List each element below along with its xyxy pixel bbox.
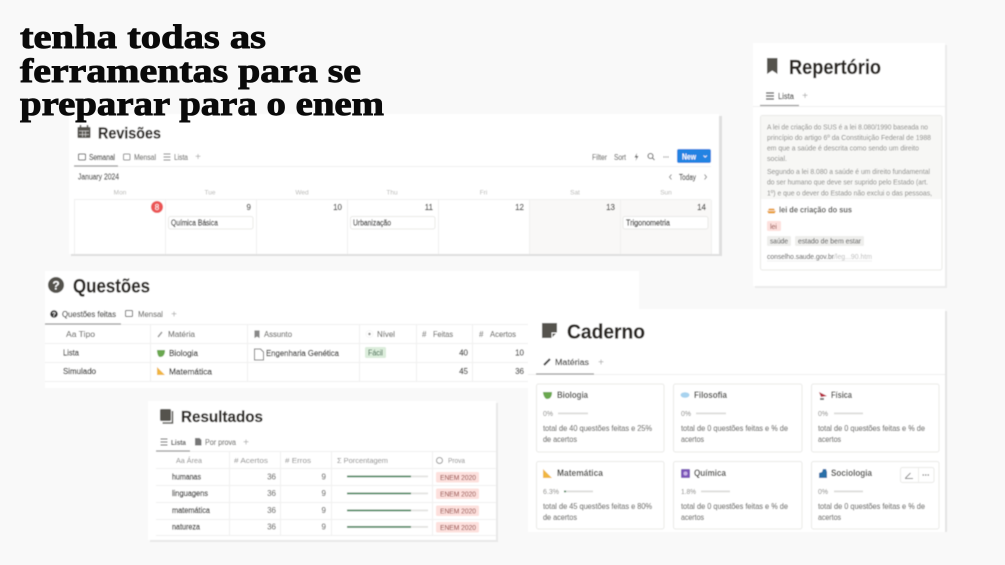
toolbar bbox=[592, 153, 668, 162]
table header: Assunto bbox=[264, 330, 293, 339]
card: Biologia: de acertos bbox=[543, 435, 577, 444]
icon: note bbox=[542, 323, 557, 338]
event: Urbanização bbox=[350, 216, 435, 229]
panel: Resultados bbox=[148, 401, 498, 542]
row: linguagens bbox=[172, 488, 479, 499]
text block: preview: princípio do artigo 6º da Constituição Federal de 1988 bbox=[767, 133, 931, 142]
link: /leg...90.htm bbox=[834, 252, 872, 261]
today badge bbox=[151, 201, 163, 213]
row: Lista: Lista bbox=[63, 348, 80, 358]
tab: Lista: Lista bbox=[778, 92, 795, 101]
tabs: + bbox=[171, 310, 177, 320]
text block: preview: em que a saúde é descrita como sendo um direito bbox=[767, 144, 919, 152]
row: humanas bbox=[172, 472, 479, 482]
event: Trigonometria bbox=[623, 216, 708, 229]
table header: Nível bbox=[377, 330, 395, 339]
card: Física: total de 0 questões feitas e % de bbox=[818, 424, 926, 433]
row: matemática bbox=[172, 506, 479, 516]
heading: Repertório: Repertório bbox=[789, 57, 881, 79]
text block: preview: do ser humano que deve ser suprido pelo Estado (art. bbox=[767, 178, 928, 186]
link: conselho.saude.gov.br bbox=[767, 252, 834, 261]
table header: Aa Área bbox=[176, 456, 203, 465]
title: tenha todas as bbox=[20, 19, 266, 56]
panel: Caderno bbox=[528, 309, 947, 532]
panel: Questões bbox=[45, 271, 639, 388]
row: natureza bbox=[172, 522, 479, 532]
table header: # Erros bbox=[285, 456, 311, 465]
heading: Resultados: Resultados bbox=[181, 409, 263, 426]
table bbox=[156, 452, 496, 536]
card: Sociologia: 0% bbox=[818, 487, 828, 496]
date numbers: 10 bbox=[333, 203, 343, 212]
tag: estado de bem estar: estado de bem estar bbox=[798, 237, 861, 246]
icon: scales bbox=[767, 208, 776, 214]
tabs: Mensal bbox=[134, 153, 156, 162]
card: Filosofia bbox=[674, 384, 802, 452]
navigation: Today bbox=[670, 173, 706, 182]
event: Trigonometria: Trigonometria bbox=[626, 218, 670, 227]
date numbers: 9 bbox=[247, 203, 252, 212]
tab: Lista bbox=[766, 91, 808, 102]
text block: preview: social. bbox=[767, 154, 787, 163]
weekday headers: Mon bbox=[114, 190, 127, 196]
card: Física bbox=[812, 384, 939, 452]
row: matemática: 9 bbox=[322, 506, 327, 515]
card: Sociologia bbox=[812, 462, 939, 529]
button: New: New bbox=[682, 152, 697, 162]
card: Sociologia: total de 0 questões feitas e % de bbox=[818, 502, 926, 511]
weekday headers: Fri bbox=[480, 190, 487, 196]
tab: Matérias bbox=[544, 358, 604, 368]
card: Filosofia: total de 0 questões feitas e % de bbox=[681, 424, 789, 433]
card: Física: acertos bbox=[818, 435, 841, 444]
card: Matemática: de acertos bbox=[543, 513, 577, 522]
icon: question bbox=[48, 277, 64, 293]
row: Lista: Fácil bbox=[368, 348, 383, 358]
panel: Repertório bbox=[753, 43, 947, 288]
toolbar: Filter bbox=[592, 153, 607, 162]
row: Simulado: 36 bbox=[515, 367, 525, 376]
card: Matemática: 6.3% bbox=[543, 487, 559, 496]
table header: Acertos bbox=[490, 330, 516, 339]
tag: saúde: saúde bbox=[770, 237, 788, 246]
card: Química: total de 0 questões feitas e % de bbox=[681, 502, 789, 511]
card: Química: Química bbox=[694, 468, 727, 478]
table header: # bbox=[422, 330, 427, 339]
navigation: Today: Today bbox=[679, 173, 696, 182]
table header: # bbox=[479, 330, 484, 339]
table header bbox=[66, 330, 516, 339]
heading: Revisões: Revisões bbox=[98, 126, 161, 142]
card: lei de criação do sus bbox=[760, 116, 942, 270]
row: Simulado bbox=[63, 367, 525, 376]
month label: January 2024 bbox=[78, 172, 119, 182]
row: humanas: 36 bbox=[267, 472, 277, 482]
icon: bookmark bbox=[767, 58, 778, 74]
weekday headers: Wed bbox=[295, 190, 309, 196]
row: humanas: ENEM 2020 bbox=[440, 473, 476, 482]
icon: calendar bbox=[78, 125, 90, 138]
table header: Matéria bbox=[168, 330, 196, 339]
row: humanas: 9 bbox=[322, 472, 327, 482]
weekday headers bbox=[114, 190, 672, 196]
calendar grid bbox=[74, 200, 712, 254]
row: Lista: 10 bbox=[515, 348, 525, 358]
row: Lista bbox=[63, 347, 525, 360]
row: linguagens: 9 bbox=[322, 489, 327, 498]
table header: Feitas bbox=[433, 330, 453, 339]
card: Biologia: Biologia bbox=[557, 390, 589, 400]
icon: question: ? bbox=[52, 278, 60, 292]
panel: Revisões bbox=[69, 114, 722, 256]
tabs: Por prova bbox=[205, 438, 236, 447]
card: Filosofia: acertos bbox=[681, 435, 704, 444]
card: Química: acertos bbox=[681, 513, 704, 522]
text block: preview bbox=[767, 122, 932, 198]
tabs: Mensal bbox=[138, 310, 163, 319]
tabs: Lista bbox=[171, 438, 187, 447]
card: Matemática: total de 45 questões feitas e 80% bbox=[543, 502, 652, 511]
row: matemática: 36 bbox=[267, 506, 277, 515]
row: humanas: humanas bbox=[172, 472, 201, 482]
date numbers: 14 bbox=[697, 203, 707, 212]
card title: lei de criação do sus bbox=[779, 204, 852, 214]
heading: Caderno: Caderno bbox=[567, 322, 645, 344]
table header: Σ Porcentagem bbox=[337, 456, 388, 465]
table header bbox=[176, 456, 466, 465]
tabs: + bbox=[195, 152, 201, 163]
card: Biologia: total de 40 questões feitas e 25% bbox=[543, 424, 652, 433]
card: Sociologia: acertos bbox=[818, 513, 841, 522]
today badge: 8 bbox=[155, 203, 160, 212]
row: Lista: 40 bbox=[459, 348, 469, 358]
button: New bbox=[677, 149, 711, 163]
card: Química: 1.8% bbox=[681, 487, 696, 496]
date numbers bbox=[247, 203, 707, 212]
row: Simulado: Matemática bbox=[169, 368, 213, 376]
text block: preview: Segundo a lei 8.080 a saúde é um direito fundamental bbox=[767, 167, 930, 176]
tabs: Semanal bbox=[89, 153, 115, 162]
card: Filosofia: Filosofia bbox=[694, 390, 728, 400]
tab: Lista: + bbox=[802, 91, 808, 102]
row: Lista: Biologia bbox=[169, 349, 199, 358]
card: Química bbox=[674, 462, 802, 529]
icon: books bbox=[160, 409, 172, 423]
card: Matemática: Matemática bbox=[557, 468, 604, 478]
title: ferramentas para se bbox=[20, 53, 361, 90]
event: Urbanização: Urbanização bbox=[353, 218, 391, 227]
tabs: ? bbox=[52, 312, 56, 318]
card: Física: Física bbox=[831, 390, 853, 400]
date numbers: 13 bbox=[606, 203, 616, 212]
title: preparar para o enem bbox=[20, 86, 384, 123]
tabs: Questões feitas bbox=[62, 310, 116, 319]
title bbox=[20, 19, 384, 123]
row: Lista: Engenharia Genética bbox=[266, 349, 340, 358]
toolbar: Sort bbox=[614, 153, 627, 162]
row: linguagens: 36 bbox=[267, 489, 277, 498]
card: Matemática bbox=[536, 462, 664, 529]
row: natureza: 36 bbox=[267, 522, 277, 532]
table header: Aa Tipo bbox=[66, 330, 96, 339]
date numbers: 11 bbox=[425, 203, 434, 212]
row: natureza: ENEM 2020 bbox=[440, 523, 476, 532]
row: natureza: 9 bbox=[322, 522, 327, 532]
tab: Matérias: + bbox=[598, 358, 604, 368]
card: Física: 0% bbox=[818, 409, 828, 418]
weekday headers: Tue bbox=[205, 190, 216, 196]
tabs: Lista bbox=[174, 153, 188, 162]
row: matemática: ENEM 2020 bbox=[440, 506, 476, 516]
table header: Prova bbox=[448, 456, 466, 465]
row: linguagens: linguagens bbox=[172, 489, 208, 498]
tabs bbox=[78, 152, 201, 163]
row: matemática: matemática bbox=[172, 506, 210, 515]
weekday headers: Sat bbox=[570, 190, 580, 196]
row: natureza: natureza bbox=[172, 522, 200, 532]
event: Química Básica: Química Básica bbox=[171, 218, 218, 227]
card: Sociologia: Sociologia bbox=[831, 468, 873, 478]
weekday headers: Thu bbox=[386, 190, 398, 196]
row: Simulado: Simulado bbox=[63, 367, 97, 376]
card: Filosofia: 0% bbox=[681, 409, 691, 418]
row: Simulado: 45 bbox=[459, 367, 469, 376]
heading: Questões: Questões bbox=[73, 276, 150, 298]
row: linguagens: ENEM 2020 bbox=[440, 490, 476, 498]
date numbers: 12 bbox=[515, 203, 525, 212]
text block: preview: A lei de criação do SUS é a lei 8.080/1990 baseada no bbox=[767, 122, 928, 132]
card: Biologia bbox=[536, 384, 664, 452]
table header: # Acertos bbox=[234, 456, 268, 465]
event: Química Básica bbox=[168, 216, 253, 229]
text block: preview: 1º) e que o dever do Estado não exclui o das pessoas, bbox=[767, 188, 932, 198]
table bbox=[45, 325, 529, 382]
tabs bbox=[50, 310, 177, 320]
tabs bbox=[160, 438, 249, 448]
tabs: + bbox=[243, 438, 249, 448]
tag: lei bbox=[767, 221, 781, 231]
tab: Matérias: Matérias bbox=[555, 358, 589, 367]
tag: lei: lei bbox=[770, 222, 777, 231]
weekday headers: Sun bbox=[660, 190, 672, 196]
card: Biologia: 0% bbox=[543, 409, 553, 418]
hover buttons bbox=[900, 468, 934, 482]
